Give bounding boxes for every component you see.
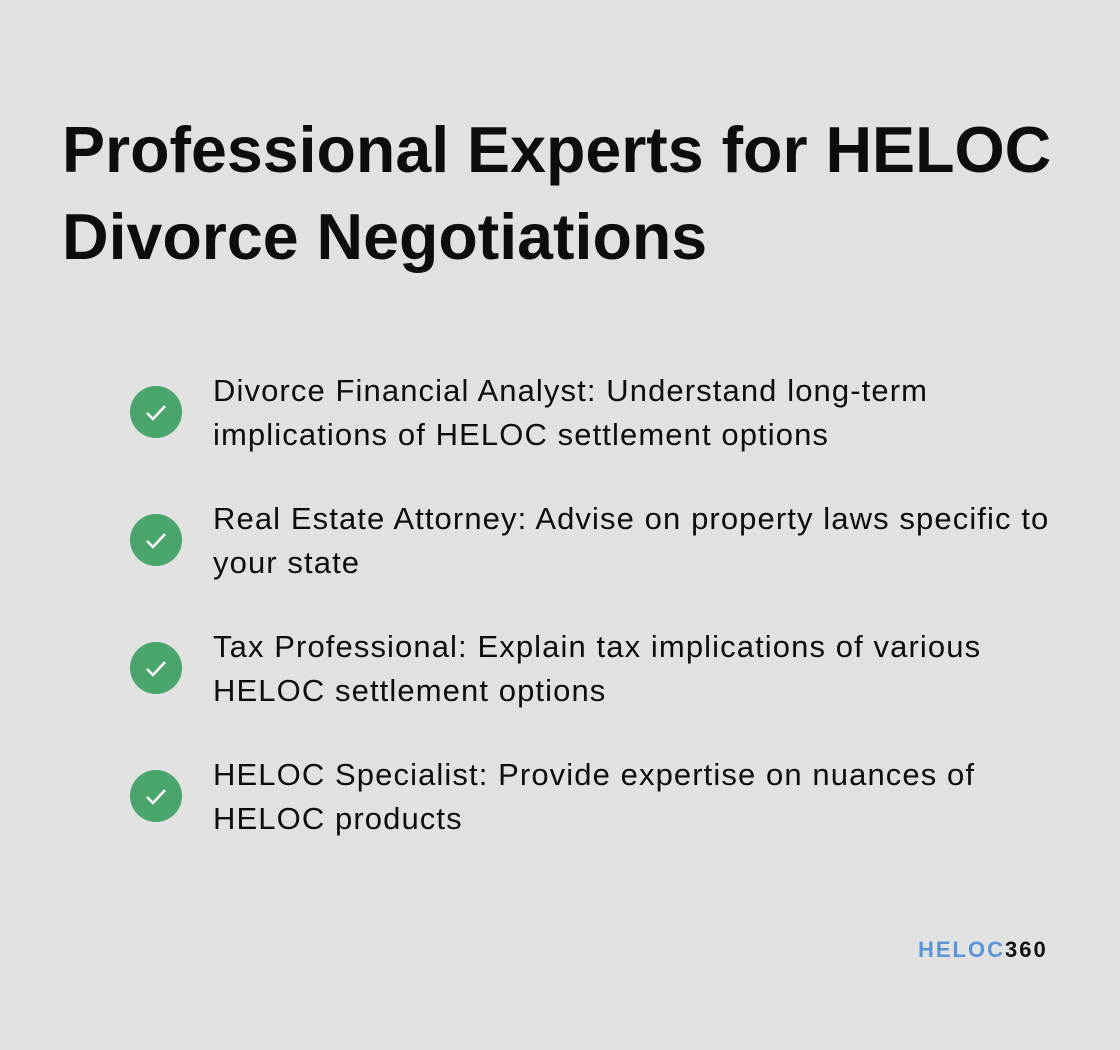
text: implications of HELOC settlement options: [213, 417, 829, 452]
icon: check: [130, 642, 182, 694]
text: HELOC settlement options: [213, 673, 606, 708]
text: your state: [213, 545, 360, 580]
icon: check: [130, 770, 182, 822]
text: Divorce Financial Analyst: Understand long-term: [213, 373, 928, 408]
item: attorney: [130, 501, 1049, 580]
text: [213, 629, 981, 708]
text: [213, 757, 975, 836]
item: tax: [130, 629, 981, 708]
item: financial analyst: [130, 373, 928, 452]
title: [62, 114, 1051, 273]
title: Professional Experts for HELOC: [62, 114, 1051, 186]
title: Divorce Negotiations: [62, 201, 707, 273]
text: HELOC Specialist: Provide expertise on nuances of: [213, 757, 975, 792]
text: [213, 501, 1049, 580]
item: specialist: [130, 757, 975, 836]
text: Tax Professional: Explain tax implications of various: [213, 629, 981, 664]
text: Real Estate Attorney: Advise on property laws specific to: [213, 501, 1049, 536]
text: [213, 373, 928, 452]
text: HELOC products: [213, 801, 463, 836]
icon: check: [130, 514, 182, 566]
logo: HELOC360: [918, 937, 1048, 962]
icon: check: [130, 386, 182, 438]
